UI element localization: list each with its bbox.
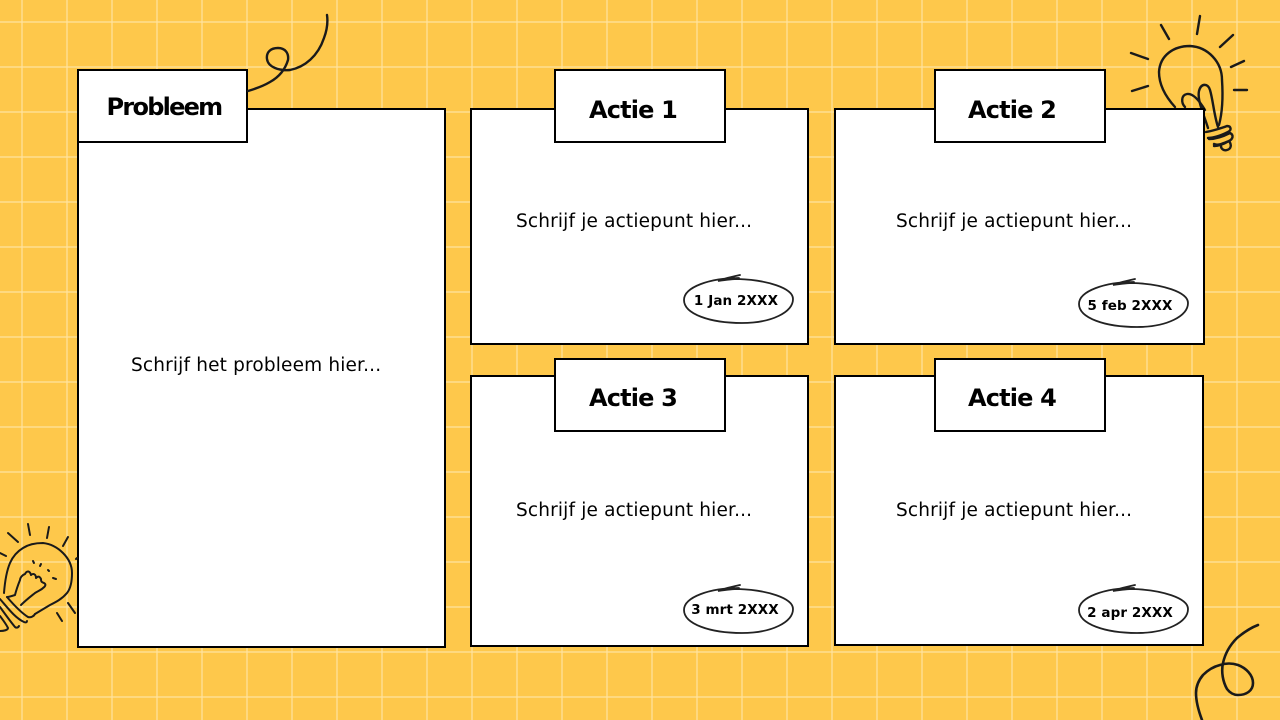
heading tab: Actie 1: Actie 1 [589,96,677,124]
action text 4: Schrijf je actiepunt hier... [896,500,1132,521]
date badge: 1 Jan 2XXX [683,274,794,324]
heading tab: Actie 2: Actie 2 [968,96,1056,124]
heading tab: Actie 1 [554,69,726,143]
date badge: 3 mrt 2XXX: 3 mrt 2XXX [691,602,779,618]
panel: Probleem [77,108,446,648]
panel: Actie 4 [834,375,1204,646]
date badge: 5 feb 2XXX: 5 feb 2XXX [1087,298,1173,314]
action text 1: Schrijf je actiepunt hier... [516,211,752,232]
date badge: 3 mrt 2XXX [683,584,794,634]
heading tab: Actie 4: Actie 4 [968,384,1056,412]
problem text: Schrijf het probleem hier... [131,355,381,376]
heading tab: Actie 3: Actie 3 [589,384,677,412]
date badge: 2 apr 2XXX [1078,584,1189,634]
action text 2: Schrijf je actiepunt hier... [896,211,1132,232]
date badge: 5 feb 2XXX [1078,278,1189,328]
action text 3: Schrijf je actiepunt hier... [516,500,752,521]
heading tab: Actie 2 [934,69,1106,143]
heading tab: Probleem: Probleem [107,93,221,121]
panel: Actie 1 [470,108,809,345]
panel: Actie 2 [834,108,1205,345]
date badge: 1 Jan 2XXX: 1 Jan 2XXX [694,293,778,309]
heading tab: Actie 4 [934,358,1106,432]
heading tab: Actie 3 [554,358,726,432]
heading tab: Probleem [77,69,248,143]
panel: Actie 3 [470,375,809,647]
date badge: 2 apr 2XXX: 2 apr 2XXX [1087,605,1173,621]
